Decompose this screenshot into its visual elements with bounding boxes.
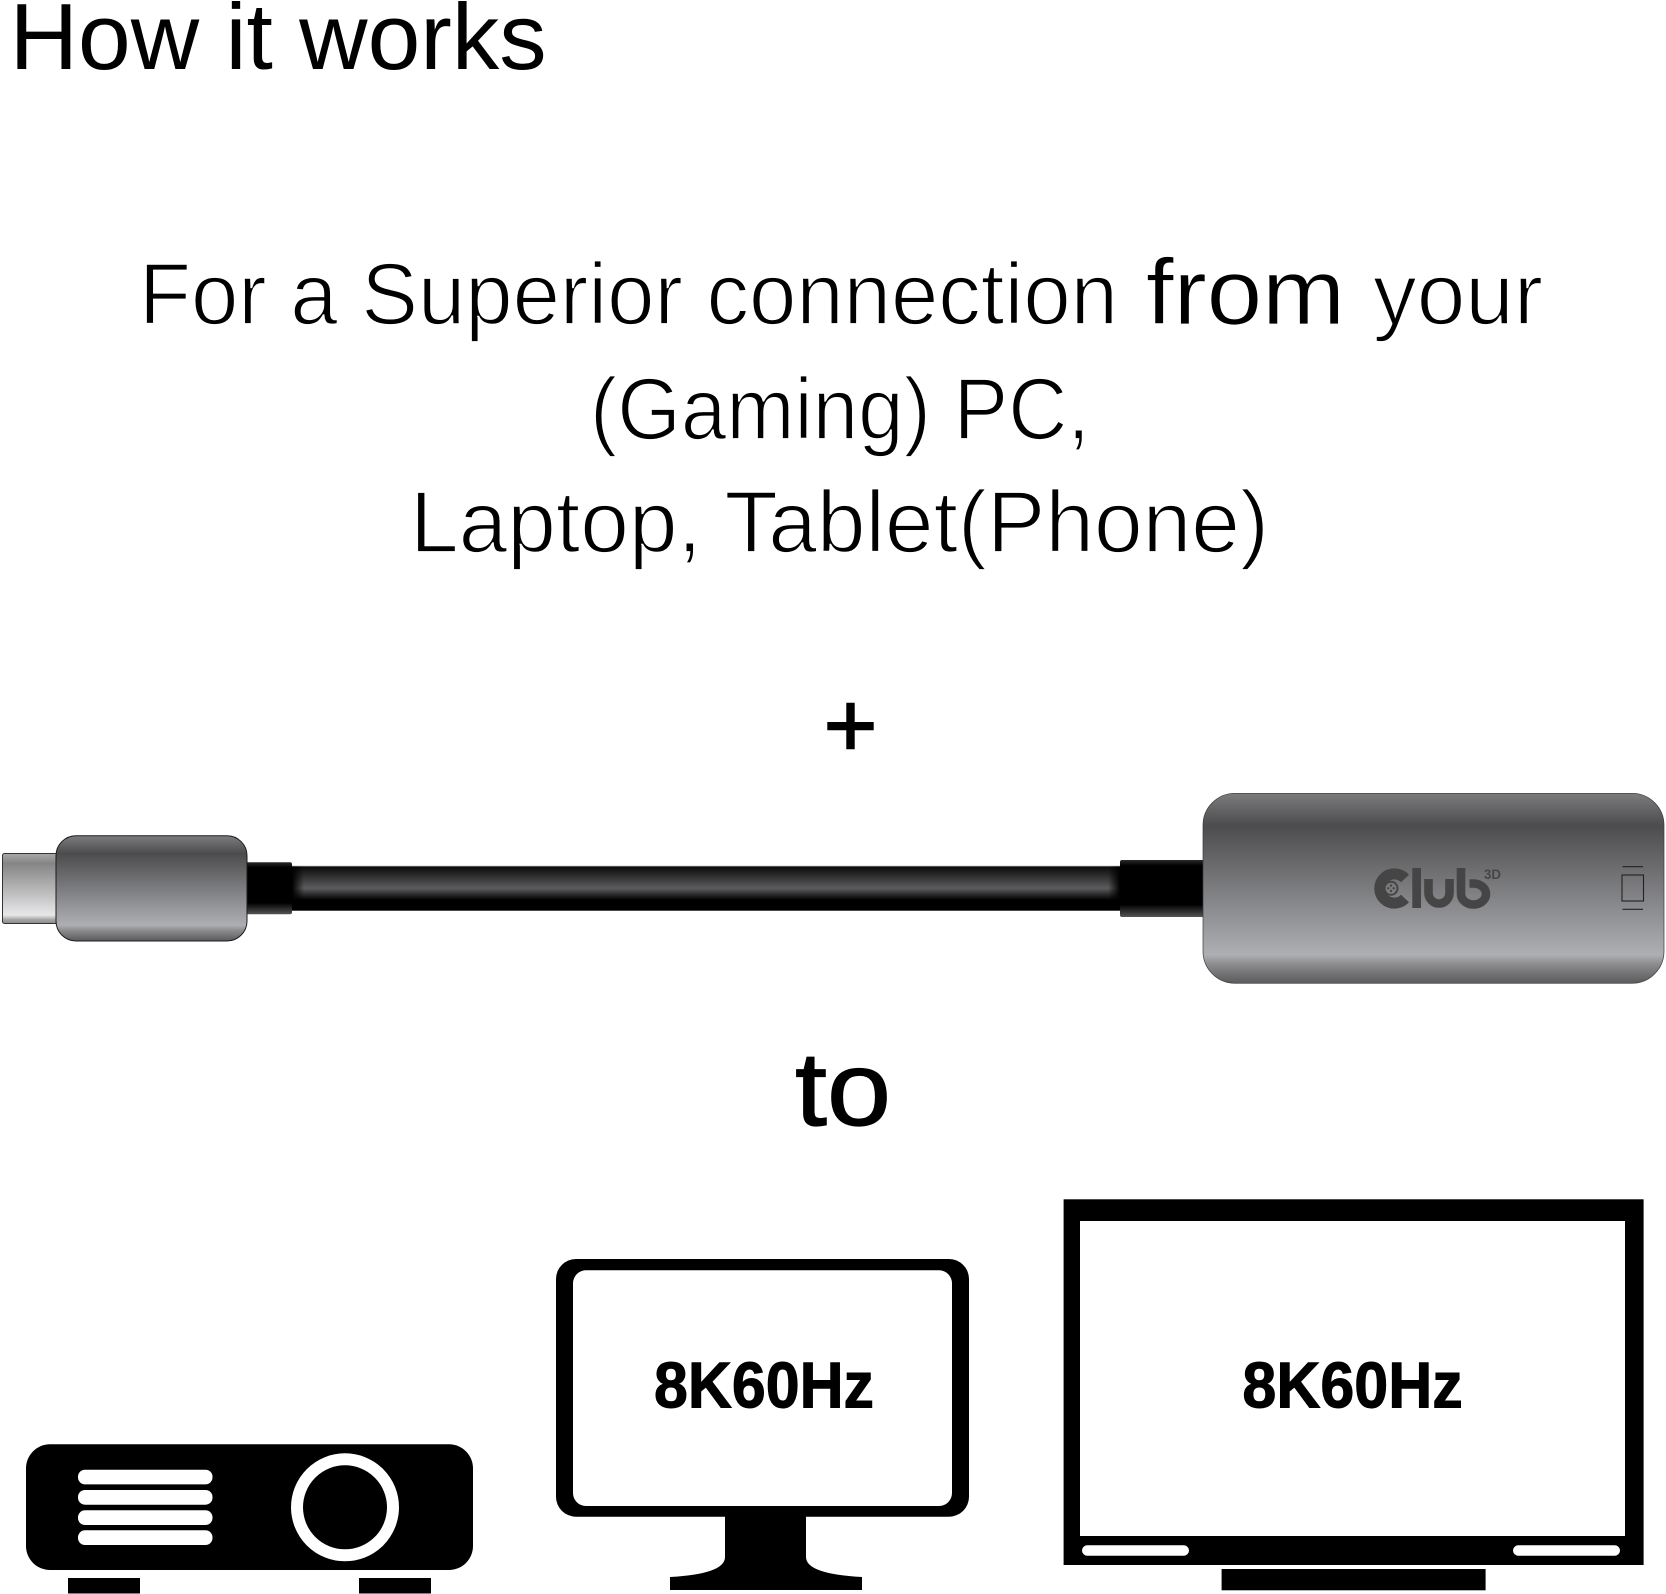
plus sign xyxy=(827,703,874,749)
left strain relief xyxy=(240,862,292,914)
text line 3: Laptop, Tablet(Phone) xyxy=(410,474,1269,571)
monitor screen xyxy=(573,1270,952,1506)
word: to: to xyxy=(795,1031,891,1148)
HDMI port icon xyxy=(1622,867,1644,909)
monitor stand xyxy=(670,1514,862,1590)
projector body xyxy=(26,1444,473,1570)
text line 1: your xyxy=(1373,246,1543,343)
tv speaker slots xyxy=(1082,1545,1620,1556)
icon: television xyxy=(1064,1199,1644,1590)
adapter cable xyxy=(2,793,1664,983)
icon: projector xyxy=(26,1444,473,1594)
tv frame xyxy=(1064,1199,1644,1565)
tv screen xyxy=(1080,1221,1625,1536)
text line 1: For a Superior connection xyxy=(139,246,1118,343)
projector feet xyxy=(68,1578,431,1594)
right strain relief xyxy=(1120,860,1210,917)
tv stand xyxy=(1222,1569,1486,1590)
logo: Club3D xyxy=(1380,866,1501,908)
adapter housing xyxy=(1203,793,1664,983)
cable xyxy=(285,866,1125,911)
monitor frame xyxy=(556,1259,969,1517)
USB-C metal tip xyxy=(2,854,58,924)
icon: monitor xyxy=(556,1259,969,1590)
projector vents xyxy=(78,1470,212,1545)
cable end shading xyxy=(292,866,1120,910)
monitor resolution label: 8K60Hz xyxy=(654,1348,874,1422)
word: from: from xyxy=(1146,240,1345,344)
intro text xyxy=(139,240,1543,571)
text line 2: (Gaming) PC, xyxy=(590,361,1090,458)
USB-C housing xyxy=(56,836,247,941)
tv resolution label: 8K60Hz xyxy=(1242,1348,1463,1422)
logo: Club3D: 3D xyxy=(1484,866,1501,882)
projector lens xyxy=(297,1459,393,1555)
